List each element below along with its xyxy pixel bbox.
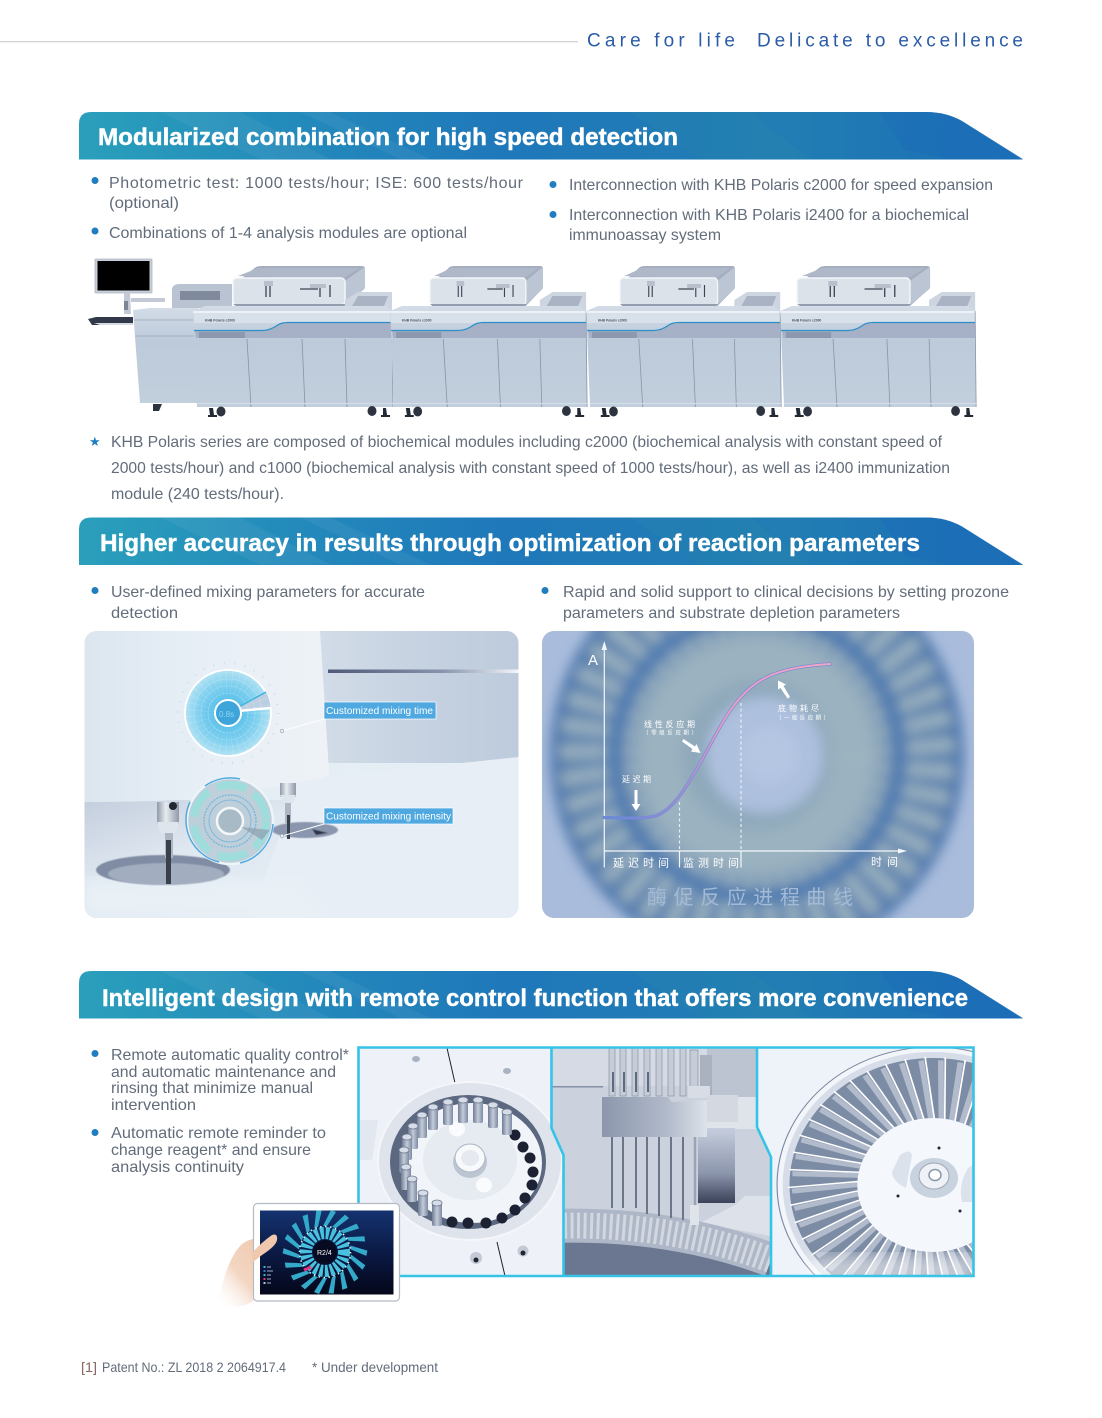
series note with star: module (240 tests/hour). — [111, 486, 284, 503]
tablet screen — [260, 1210, 394, 1294]
dial: mixing time — [178, 663, 278, 763]
section 1 right bullets — [550, 177, 993, 244]
callout: mixing time: Customized mixing time — [326, 705, 433, 717]
tablet with hand — [218, 1204, 400, 1307]
tagline: delicate to excellence: Delicate to excellence — [757, 30, 1023, 52]
series note with star — [89, 434, 950, 503]
section 3 heading banner: Intelligent design with remote control function that offers more convenience — [102, 985, 968, 1012]
hand — [218, 1235, 278, 1307]
screen legend — [264, 1266, 273, 1284]
phase labels: 监测时间 — [683, 856, 739, 870]
section 2 heading banner — [79, 518, 1023, 565]
section 3 bullets: intervention — [111, 1097, 196, 1114]
section 3 bullets: Automatic remote reminder to — [111, 1125, 326, 1142]
analysis modules — [193, 292, 976, 417]
top rule and tagline — [0, 30, 1023, 52]
dial: mixing intensity — [186, 778, 273, 864]
section 1 right bullets: immunoassay system — [569, 227, 721, 244]
reagent disk graphic: R2/4 — [317, 1250, 332, 1257]
section 1 heading banner: Modularized combination for high speed detection — [98, 124, 678, 151]
phase labels: （零级反应期） — [643, 728, 697, 736]
dial: mixing time: 0.8s — [219, 710, 234, 719]
section 2 left bullet: User-defined mixing parameters for accurate — [111, 584, 425, 601]
callout: mixing time — [280, 702, 436, 733]
sample loader unit — [133, 284, 232, 411]
section 2 right bullet: parameters and substrate depletion parameters — [563, 605, 900, 622]
mixing holes — [96, 822, 338, 885]
section 1 left bullets — [92, 175, 524, 242]
section 2 right bullet: Rapid and solid support to clinical decisions by setting prozone — [563, 584, 1009, 601]
hoods — [233, 266, 930, 309]
axis label A: A — [588, 652, 598, 669]
chart title: 酶促反应进程曲线 — [647, 886, 853, 909]
cyan frame and dividers — [358, 1048, 974, 1276]
axes and ticks — [604, 644, 904, 868]
section 1 right bullets: Interconnection with KHB Polaris i2400 for a biochemical — [569, 207, 969, 224]
section 1 left bullets: (optional) — [109, 195, 179, 212]
phase labels: 时间 — [871, 856, 898, 868]
curve arrows — [632, 680, 790, 811]
section 2 left bullet — [92, 584, 425, 622]
phase labels: （一级反应期） — [776, 714, 829, 722]
tablet body — [254, 1204, 400, 1301]
axis arrowheads — [602, 641, 907, 854]
phase labels: 线性反应期 — [644, 719, 695, 729]
monitor and keyboard arm — [88, 259, 165, 325]
mixing probes — [157, 783, 296, 884]
image strip: sample carousel, probes, reaction disk — [357, 1046, 975, 1278]
panel: enzymatic reaction curve — [542, 631, 974, 918]
footnotes: * Under development — [312, 1359, 438, 1375]
panel: mixing parameters photo — [84, 631, 519, 918]
section 3 bullets: analysis continuity — [111, 1159, 244, 1176]
phase labels: 延迟时间 — [613, 856, 669, 870]
thumb — [253, 1235, 277, 1262]
section 1 left bullets: Combinations of 1-4 analysis modules are optional — [109, 225, 467, 242]
photo: sample carousel — [358, 1048, 564, 1277]
photo: dispensing probes — [551, 1048, 772, 1277]
section 3 bullets: rinsing that minimize manual — [111, 1080, 313, 1097]
footnotes — [81, 1359, 438, 1375]
section 2 heading banner: Higher accuracy in results through optimization of reaction parameters — [100, 530, 920, 557]
analyzer machine illustration — [88, 259, 976, 417]
footnotes: Patent No.: ZL 2018 2 2064917.4 — [102, 1359, 286, 1375]
section 3 bullets — [92, 1047, 349, 1176]
section 1 left bullets: Photometric test: 1000 tests/hour; ISE: 600 tests/hour — [109, 175, 524, 192]
section 1 heading banner — [79, 112, 1023, 160]
reaction curve — [604, 664, 830, 818]
phase labels — [613, 703, 898, 870]
footnotes: [1] — [81, 1359, 97, 1375]
section 1 right bullets: Interconnection with KHB Polaris c2000 for speed expansion — [569, 177, 993, 194]
section 2 left bullet: detection — [111, 605, 178, 622]
instrument cabinet — [84, 631, 329, 802]
section 3 bullets: Remote automatic quality control* — [111, 1047, 349, 1064]
reagent disk graphic — [282, 1209, 368, 1295]
series note with star: KHB Polaris series are composed of biochemical modules including c2000 (biochemical analysis with constant speed of — [111, 434, 943, 451]
phase labels: 底物耗尽 — [778, 703, 819, 713]
callout: mixing intensity — [280, 808, 453, 838]
tagline: care for life: Care for life — [587, 30, 735, 52]
series note with star: 2000 tests/hour) and c1000 (biochemical analysis with constant speed of 1000 tests/hour), as well as i2400 immunization — [111, 460, 950, 477]
section 3 bullets: and automatic maintenance and — [111, 1064, 336, 1081]
section 2 right bullet — [542, 584, 1009, 622]
photo: reaction disk — [758, 1048, 972, 1275]
back wall — [320, 631, 519, 763]
callout: mixing intensity: Customized mixing intensity — [326, 810, 452, 822]
phase labels: 延迟期 — [622, 774, 651, 784]
blurred turbine background — [542, 631, 972, 918]
section 3 bullets: change reagent* and ensure — [111, 1142, 311, 1159]
floor — [84, 800, 292, 876]
series note with star: ★ — [89, 435, 101, 450]
section 3 heading banner — [79, 971, 1023, 1018]
